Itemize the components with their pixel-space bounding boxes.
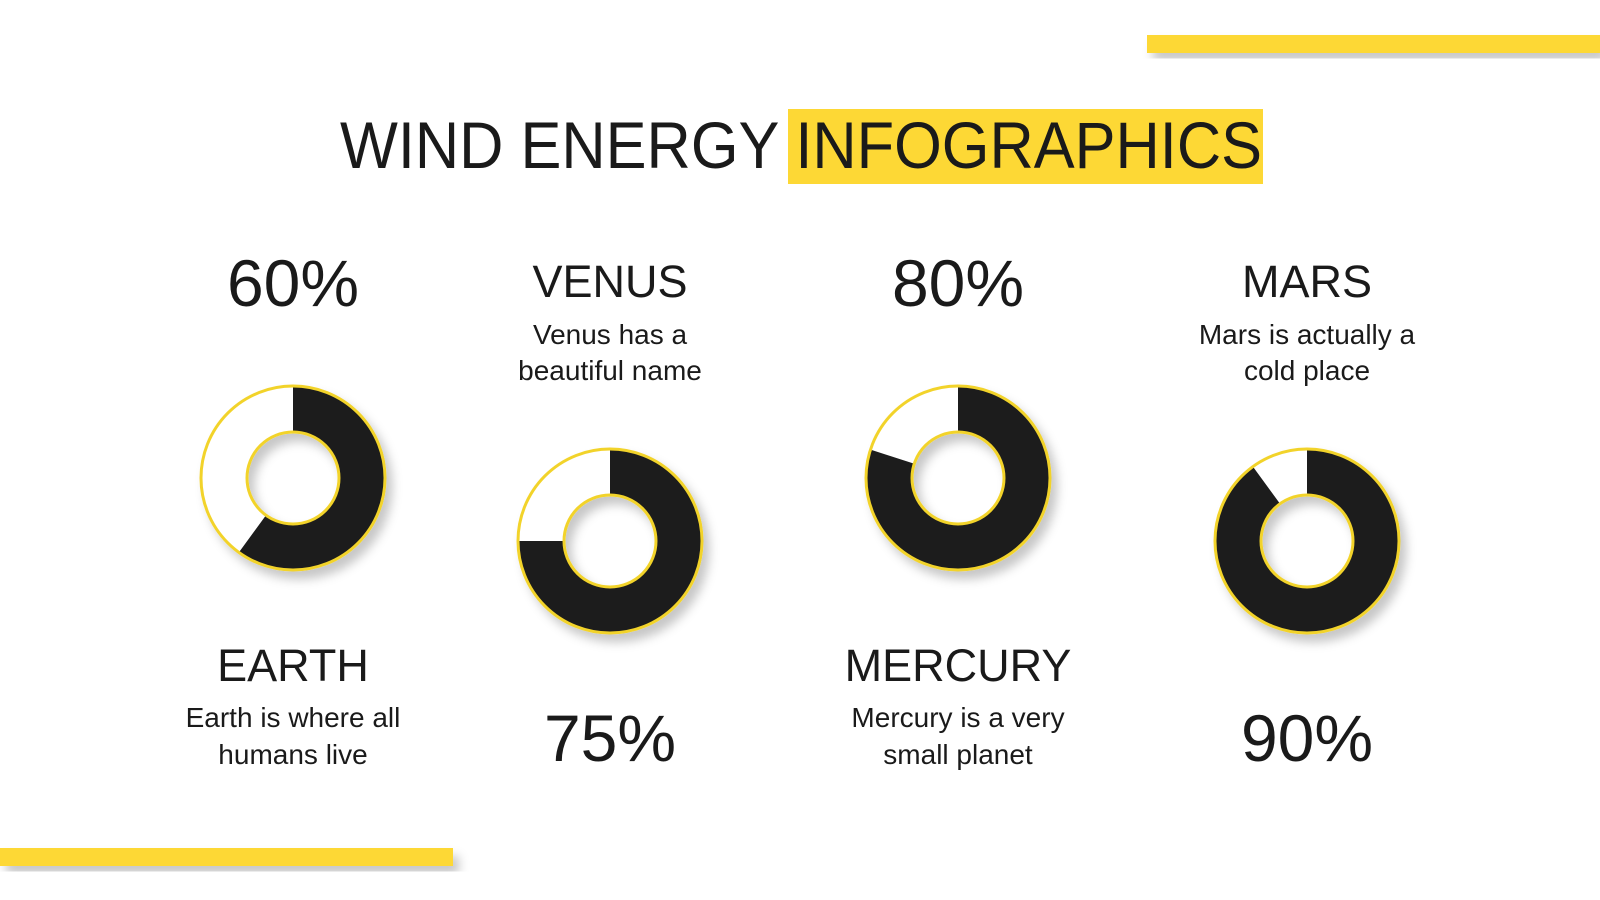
- item: venus: beautiful name: [518, 355, 702, 386]
- item: venus: 75%: [544, 701, 676, 775]
- item: mars: [1199, 256, 1416, 775]
- item: earth: humans live: [218, 739, 368, 770]
- item: venus: [518, 256, 702, 775]
- item: venus: VENUS: [532, 256, 688, 307]
- item: mercury: MERCURY: [845, 640, 1071, 691]
- item: earth: Earth is where all: [186, 702, 400, 733]
- item: mercury: Mercury is a very: [851, 702, 1065, 733]
- donut: earth 60%: [201, 386, 385, 570]
- item: venus: Venus has a: [533, 319, 687, 350]
- item: mars: Mars is actually a: [1199, 319, 1416, 350]
- item: mars: 90%: [1241, 701, 1373, 775]
- title highlight: [788, 109, 1263, 184]
- donut: mercury 80%: [866, 386, 1050, 570]
- item: earth: [186, 246, 400, 770]
- item: earth: EARTH: [217, 640, 369, 691]
- top yellow bar: [1147, 35, 1600, 53]
- donut: venus 75%: [518, 449, 702, 633]
- title: WIND ENERGY INFOGRAPHICS: [340, 108, 1262, 182]
- item: mercury: small planet: [883, 739, 1033, 770]
- donut: mars 90%: [1215, 449, 1399, 633]
- item: mars: MARS: [1242, 256, 1372, 307]
- item: mercury: [845, 246, 1071, 770]
- item: mars: cold place: [1244, 355, 1370, 386]
- item: earth: 60%: [227, 246, 359, 320]
- bottom yellow bar: [0, 848, 453, 866]
- item: mercury: 80%: [892, 246, 1024, 320]
